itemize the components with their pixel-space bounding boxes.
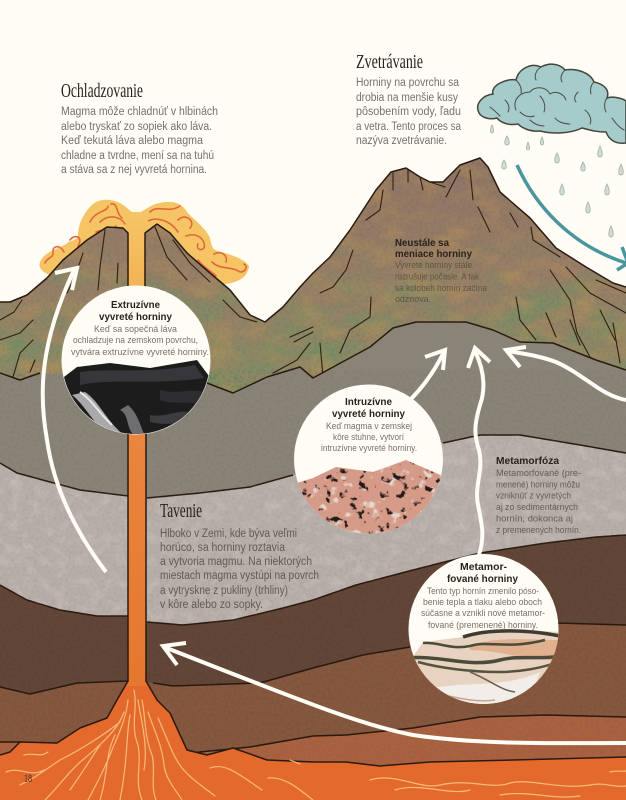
text: intrusive caption: intruzívne vyvreté horniny. xyxy=(321,443,417,454)
lava splash on volcano xyxy=(39,200,249,300)
text: intrusive caption: kôre stuhne, vytvorí xyxy=(333,432,404,443)
text block: Neustále sa meniace horniny: rozrušuje počasie. A tak xyxy=(395,272,479,282)
text block: Ochladzovanie: alebo tryskať zo sopiek ako láva. xyxy=(61,121,212,133)
text: metamorphic caption: súčasne a vznikli nové metamor- xyxy=(421,608,545,619)
rock layers xyxy=(0,322,626,800)
text block: Neustále sa meniace horniny: Vyvreté horniny stále xyxy=(395,260,472,271)
text block: Tavenie: a vytryskne z pukliny (trhliny) xyxy=(160,585,288,597)
text: metamorphic caption: fované (premenené) horniny. xyxy=(428,620,538,631)
text block: Ochladzovanie: Keď tekutá láva alebo magma xyxy=(61,135,204,147)
text block: Zvetrávanie xyxy=(356,51,462,147)
text block: Zvetrávanie: pôsobením vody, ľadu xyxy=(356,106,461,118)
text block: Zvetrávanie: Zvetrávanie xyxy=(356,51,423,73)
photo: obsidian rock xyxy=(64,360,208,434)
text block: Neustále sa meniace horniny: Neustále sa xyxy=(395,237,449,249)
arrow: metamorphosis wavy up xyxy=(468,348,490,555)
text: extrusive caption: Extruzívne xyxy=(111,299,160,311)
text block: Metamorfóza: menené) horniny môžu xyxy=(496,480,580,490)
text block: Zvetrávanie: nazýva zvetrávanie. xyxy=(356,135,447,147)
text block: Neustále sa meniace horniny: sa kolobeh hornín začína xyxy=(395,283,488,294)
circle: metamorphic rocks xyxy=(405,554,562,710)
text: extrusive caption: vytvára extruzívne vyvreté horniny. xyxy=(71,347,209,358)
text block: Ochladzovanie xyxy=(61,80,218,176)
rain drops xyxy=(490,125,623,237)
text: intrusive caption: vyvreté horniny xyxy=(332,408,405,420)
text block: Tavenie: Tavenie xyxy=(160,500,202,522)
circle: intrusive igneous rocks xyxy=(290,384,446,540)
text: intrusive caption: Intruzívne xyxy=(345,396,392,408)
cloud xyxy=(478,64,626,143)
page number: 18 xyxy=(24,771,32,785)
text: extrusive caption: vyvreté horniny xyxy=(99,311,172,323)
text: extrusive caption xyxy=(71,299,209,358)
text block: Tavenie: Hlboko v Zemi, kde býva veľmi xyxy=(160,528,297,540)
arrow: from right to surface xyxy=(506,347,626,400)
teal arrow from rain xyxy=(517,165,626,270)
text block: Metamorfóza: vzniknúť z vyvretých xyxy=(496,490,571,502)
photo: granite xyxy=(298,460,441,534)
arrow: intrusive rock to surface xyxy=(410,350,445,400)
text block: Zvetrávanie: Horniny na povrchu sa xyxy=(356,77,460,89)
text block: Ochladzovanie: Ochladzovanie xyxy=(61,80,143,102)
text block: Metamorfóza: Metamorfované (pre- xyxy=(496,468,581,479)
text block: Metamorfóza: hornín, dokonca aj xyxy=(496,514,573,524)
text block: Metamorfóza: z premenených hornín. xyxy=(496,525,581,536)
text: intrusive caption xyxy=(321,396,417,454)
text block: Metamorfóza xyxy=(496,455,581,536)
text block: Zvetrávanie: a vetra. Tento proces sa xyxy=(356,121,462,133)
text: extrusive caption: Keď sa sopečná láva xyxy=(94,324,178,335)
text block: Zvetrávanie: drobia na menšie kusy xyxy=(356,92,458,104)
text block: Tavenie: miestach magma vystúpi na povrch xyxy=(160,570,319,582)
text: metamorphic caption xyxy=(421,561,545,631)
text block: Tavenie: horúco, sa horniny roztavia xyxy=(160,542,286,554)
volcano vent xyxy=(126,212,148,294)
text: metamorphic caption: Metamor- xyxy=(460,561,507,573)
arrow: large white arrow to magma xyxy=(163,643,626,743)
text block: Neustále sa meniace horniny: meniace horniny xyxy=(395,248,472,260)
text block: Tavenie xyxy=(160,500,319,611)
text block: Neustále sa meniace horniny: odznova. xyxy=(395,294,431,305)
text block: Ochladzovanie: a stáva sa z nej vyvretá hornina. xyxy=(61,164,207,176)
text: extrusive caption: ochladzuje na zemskom povrchu, xyxy=(73,335,198,346)
text block: Neustále sa meniace horniny xyxy=(395,237,488,305)
text: metamorphic caption: fované horniny xyxy=(447,573,518,585)
text block: Tavenie: a vytvoria magmu. Na niektorých xyxy=(160,556,312,568)
mountains xyxy=(0,158,626,400)
text block: Metamorfóza: Metamorfóza xyxy=(496,455,559,467)
circle: extrusive igneous rocks xyxy=(60,286,212,440)
text: metamorphic caption: benie tepla a tlaku alebo oboch xyxy=(423,597,542,608)
text: intrusive caption: Keď magma v zemskej xyxy=(326,421,412,432)
photo: metamorphic rock xyxy=(414,629,558,704)
text block: Ochladzovanie: chladne a tvrdne, mení sa na tuhú xyxy=(61,150,214,162)
arrow: magma up to volcano xyxy=(43,268,106,572)
text block: Tavenie: v kôre alebo zo sopky. xyxy=(160,599,263,611)
text block: Metamorfóza: aj zo sedimentárnych xyxy=(496,502,578,513)
text: metamorphic caption: Tento typ hornín zmenilo póso- xyxy=(427,586,539,597)
text block: Ochladzovanie: Magma môže chladnúť v hlbinách xyxy=(61,106,218,118)
magma chamber with lava veins xyxy=(0,286,626,800)
